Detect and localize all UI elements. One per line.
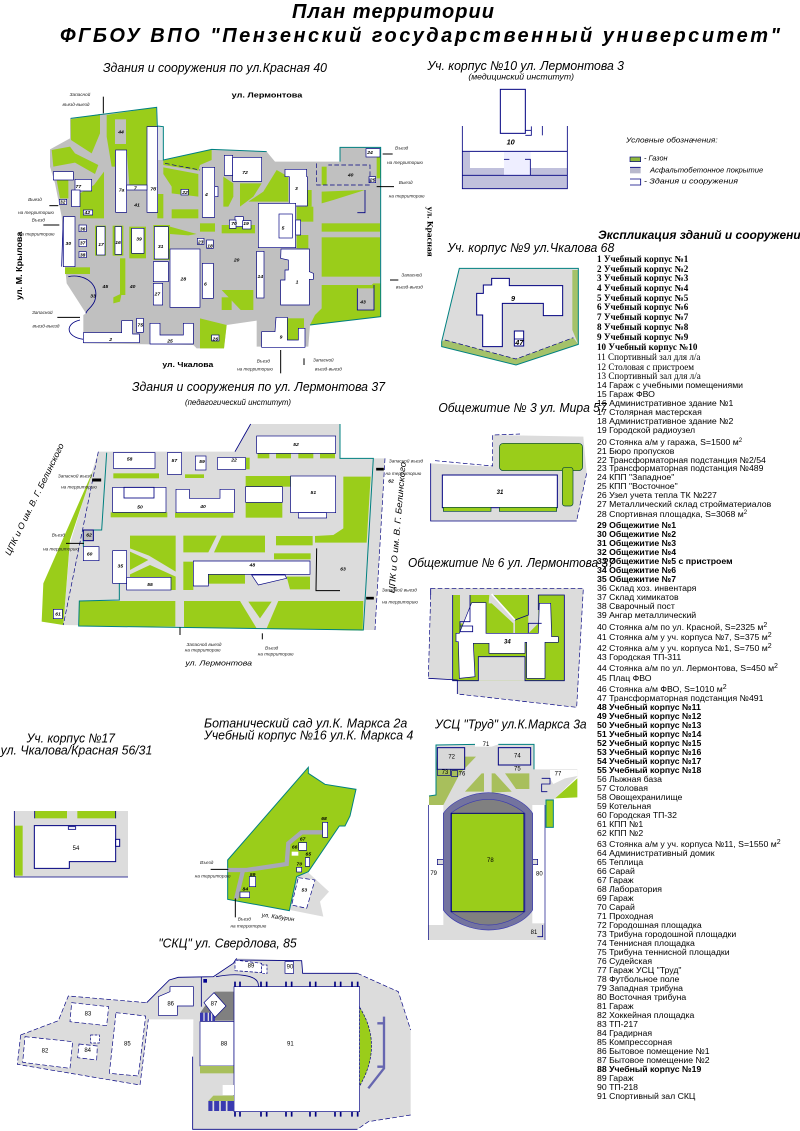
gate notes: Въезд	[265, 645, 279, 650]
heading: building 17	[0, 731, 152, 758]
building labels: 51	[311, 490, 316, 496]
map: Trud: 74	[514, 754, 521, 760]
map: Trud	[428, 742, 577, 940]
building labels: 22	[230, 458, 237, 464]
gate notes: на территорию	[61, 484, 97, 489]
explication list: 43 Городская ТП-311	[597, 652, 681, 662]
map labels: 43	[359, 299, 366, 305]
explication list: 64 Административный домик	[597, 848, 715, 858]
explication list: 54 Учебный корпус №17	[597, 756, 701, 766]
map: SKC: 89	[248, 964, 255, 970]
explication list: 20 Стоянка а/м у гаража, S=1500 м	[597, 437, 739, 447]
explication list: 30 Общежитие №2	[597, 529, 676, 539]
map: botanical garden: 67	[300, 837, 306, 843]
explication list: 49 Учебный корпус №12	[597, 711, 701, 721]
map: Trud: 78	[487, 858, 494, 864]
explication list: 59 Котельная	[597, 801, 651, 811]
map labels: 4	[204, 192, 208, 198]
explication list: 80 Восточная трибуна	[597, 992, 686, 1002]
explication list: 2 Учебный корпус №2	[597, 264, 689, 274]
legend: - Здания и сооружения	[644, 176, 738, 185]
map labels: 44	[117, 129, 124, 135]
gate notes: на территорию	[43, 547, 79, 552]
map labels: 25	[369, 178, 376, 184]
building labels: 35	[118, 564, 123, 570]
explication list: 62 КПП №2	[597, 828, 643, 838]
explication list: 74 Теннисная площадка	[597, 938, 695, 948]
map labels: 7	[134, 185, 137, 191]
map: dorm 3	[431, 434, 587, 521]
title: ФГБОУ ВПО "Пензенский государственный университет"	[60, 25, 781, 47]
explication list: 2	[768, 643, 772, 650]
explication list: 76 Судейская	[597, 956, 652, 966]
map labels: 32	[60, 200, 66, 206]
gate notes: въезд-выезд	[396, 285, 423, 290]
explication list: 2	[739, 438, 743, 444]
street names: ЦПК и О им. В. Г. Белинского	[3, 441, 66, 557]
map labels: 72	[242, 170, 248, 176]
gate notes: Запасной выезд	[382, 587, 417, 593]
map labels: 7а	[119, 187, 125, 193]
explication list: 15 Гараж ФВО	[597, 389, 655, 399]
map: Trud: 73	[442, 770, 449, 776]
map: building 17: 54	[73, 846, 80, 852]
gate notes: на территорию	[18, 210, 54, 215]
building labels: 59	[199, 459, 205, 465]
gate notes: Запасной	[32, 309, 53, 315]
map labels: 45	[102, 284, 108, 290]
explication list: 69 Гараж	[597, 893, 634, 903]
map labels: 41	[133, 203, 140, 209]
map labels: 16	[115, 240, 121, 246]
heading: dorm 6: Общежитие № 6 ул. Лермонтова 37	[408, 555, 615, 570]
map labels: 1	[296, 279, 299, 285]
heading: building 10	[426, 58, 625, 81]
explication list: 23 Трансформаторная подстанция №489	[597, 463, 764, 473]
map: SKC: 85	[124, 1042, 131, 1048]
map: botanical garden: Въезд	[200, 860, 214, 865]
explication list: 5 Учебный корпус №5	[597, 293, 689, 303]
explication list: 2	[777, 839, 781, 846]
explication list: 57 Столовая	[597, 783, 648, 793]
explication list: 90 ТП-218	[597, 1082, 638, 1092]
explication list: 40 Стоянка а/м по ул. Красной, S=2325 м	[597, 622, 763, 632]
explication list: 52 Учебный корпус №15	[597, 738, 701, 748]
gate notes: на территорию	[237, 367, 273, 372]
map: SKC: 84	[84, 1048, 92, 1054]
building labels: 55	[147, 582, 153, 588]
gate notes: Запасной	[313, 357, 334, 363]
explication list: 12 Столовая с пристроем	[597, 362, 694, 372]
explication list: 8 Учебный корпус №8	[597, 322, 689, 332]
map: botanical garden: 59	[250, 872, 256, 878]
map: Krasnaya 40 campus	[14, 91, 425, 373]
explication list: 35 Общежитие №7	[597, 574, 676, 584]
heading: building 17: Уч. корпус №17	[26, 731, 116, 746]
map labels: 38	[80, 253, 86, 259]
map labels: 25	[166, 338, 173, 344]
gate notes: Запасной выезд	[186, 641, 222, 647]
explication list: 37 Склад химикатов	[597, 592, 679, 602]
explication list: 39 Ангар металлический	[597, 610, 696, 620]
explication list: 33 Общежитие №5 с пристроем	[597, 556, 733, 566]
building labels: 60	[87, 552, 93, 558]
gate notes: Въезд	[395, 146, 409, 151]
gate notes: въезд-выезд	[315, 367, 342, 372]
explication list: 22 Трансформаторная подстанция №2/54	[597, 455, 766, 465]
explication list: 34 Общежитие №6	[597, 565, 676, 575]
map labels: 75	[138, 323, 143, 329]
map: botanical garden: 65	[306, 852, 311, 858]
explication list: 19 Городской радиоузел	[597, 425, 695, 435]
upper right area: building 10, legend, building 9	[425, 58, 763, 365]
explication list: 11 Спортивный зал для л/а	[597, 352, 700, 362]
gate notes: въезд-выезд	[33, 323, 60, 328]
map: Trud: 81	[531, 930, 538, 936]
building labels: 40	[199, 504, 206, 510]
heading: building 17: ул. Чкалова/Красная 56/31	[0, 743, 152, 758]
map labels: 40	[347, 173, 354, 179]
gate notes: Запасной въезд	[389, 457, 424, 463]
explication list: 91 Спортивный зал СКЦ	[597, 1091, 696, 1101]
gate notes: на территорию	[258, 652, 294, 657]
explication list: 67 Гараж	[597, 875, 634, 885]
explication list: 25 КПП "Восточное"	[597, 481, 678, 491]
building labels: 50	[137, 505, 143, 511]
explication list: 81 Гараж	[597, 1001, 634, 1011]
heading: building 10: Уч. корпус №10 ул. Лермонтова 3	[426, 58, 625, 73]
map: building 17	[14, 811, 128, 877]
map: SKC: 86	[167, 1002, 175, 1008]
map labels: 5	[282, 225, 285, 231]
map labels: 18	[207, 243, 213, 249]
legend: Условные обозначения:	[625, 135, 718, 144]
heading: Lermontova 37	[132, 379, 386, 407]
explication list: 61 КПП №1	[597, 819, 643, 829]
explication list: 86 Бытовое помещение №1	[597, 1046, 710, 1056]
gate notes: Запасной	[70, 91, 91, 97]
explication list: 2	[768, 632, 772, 639]
gate notes: Выезд	[28, 197, 42, 202]
explication list: 42 Стоянка а/м у уч. корпуса №1, S=750 м	[597, 643, 768, 653]
explication list	[597, 254, 781, 1101]
explication list: 31 Общежитие №3	[597, 538, 676, 548]
explication list: 48 Учебный корпус №11	[597, 702, 701, 712]
explication list: 28 Спортивная площадка, S=3068 м	[597, 509, 744, 519]
building labels: 61	[55, 612, 61, 618]
map labels: 70	[231, 221, 237, 227]
gate notes	[43, 457, 424, 657]
heading: Lermontova 37: Здания и сооружения по ул. Лермонтова 37	[132, 379, 386, 394]
map: SKC: 88	[221, 1042, 228, 1048]
explication list: 6 Учебный корпус №6	[597, 302, 689, 312]
map: botanical garden	[195, 767, 356, 928]
explication list: 16 Административное здание №1	[597, 398, 733, 408]
map: botanical garden: 66	[292, 844, 298, 850]
explication list: 78 Футбольное поле	[597, 974, 680, 984]
map labels: 23	[197, 239, 204, 245]
explication list: 4 Учебный корпус №4	[597, 283, 689, 293]
street names	[3, 441, 408, 667]
legend	[625, 135, 763, 185]
map labels: 28	[180, 277, 186, 283]
explication list: 55 Учебный корпус №18	[597, 765, 701, 775]
explication list: 73 Трибуна городошной площадки	[597, 929, 736, 939]
street names: ул. Лермонтова	[184, 658, 252, 667]
map: botanical garden: Въезд	[238, 917, 251, 922]
map labels: 2	[108, 337, 112, 343]
explication list: 84 Градирная	[597, 1028, 652, 1038]
map: botanical garden: ул. Кабурин	[260, 913, 295, 923]
map: Trud: 72	[448, 754, 456, 760]
map: SKC: 90	[287, 965, 294, 971]
gate notes: Запасной	[401, 272, 422, 278]
map labels: 9	[280, 334, 283, 340]
heading: building 10: (медицинский институт)	[468, 71, 574, 81]
explication list: 53 Учебный корпус №16	[597, 747, 701, 757]
street names	[14, 91, 303, 369]
building labels: 63	[340, 567, 346, 573]
explication list: 70 Сарай	[597, 902, 635, 912]
map labels: 42	[84, 210, 90, 216]
explication list: 88 Учебный корпус №19	[597, 1064, 701, 1074]
outlines	[63, 424, 385, 630]
explication list: 60 Городская ТП-32	[597, 810, 677, 820]
heading: dorm 3: Общежитие № 3 ул. Мира 57	[438, 400, 607, 415]
explication list: 83 ТП-217	[597, 1019, 638, 1029]
explication list: 36 Склад хоз. инвентаря	[597, 583, 697, 593]
explication list: 44 Стоянка а/м по ул. Лермонтова, S=450 м	[597, 663, 774, 673]
map: Trud: 79	[430, 871, 438, 877]
building labels: 62	[86, 532, 92, 538]
explication list: 89 Гараж	[597, 1073, 634, 1083]
building labels: 58	[127, 457, 133, 463]
explication list: 75 Трибуна теннисной площадки	[597, 947, 730, 957]
explication list: 9 Учебный корпус №9	[597, 332, 689, 342]
sports complex Trud	[428, 716, 587, 940]
gate notes: на территорию	[185, 648, 221, 653]
heading: Krasnaya 40: Здания и сооружения по ул.Красная 40	[103, 60, 328, 75]
map: building 9	[442, 268, 578, 365]
explication list: 1 Учебный корпус №1	[597, 254, 689, 264]
explication list: 7 Учебный корпус №7	[597, 312, 689, 322]
explication list: 24 КПП "Западное"	[597, 472, 674, 482]
gate notes: въезд-выезд	[63, 102, 90, 107]
street name: ул. Красная	[425, 207, 434, 257]
heading: botanical garden: Ботанический сад ул.К. Маркса 2а	[204, 715, 407, 730]
map: building 9: 9	[511, 294, 516, 303]
explication list: 72 Городошная площадка	[597, 920, 702, 930]
map labels: 6	[204, 281, 207, 287]
map: dorm 3: 31	[497, 490, 503, 496]
building labels: 48	[249, 563, 255, 569]
map labels: 30	[66, 241, 71, 247]
map labels: 14	[258, 274, 263, 280]
map labels: 7б	[150, 186, 157, 193]
building labels: 57	[172, 458, 177, 464]
explication list: 3 Учебный корпус №3	[597, 273, 689, 283]
map labels: 27	[154, 291, 160, 297]
explication list: 27 Металлический склад стройматериалов	[597, 499, 772, 509]
heading: SKC: "СКЦ" ул. Свердлова, 85	[158, 936, 297, 951]
map: dorm 6	[428, 588, 583, 707]
map labels: 37	[80, 241, 86, 247]
map labels: 17	[98, 242, 104, 248]
heading: building 9: Уч. корпус №9 ул.Чкалова 68	[446, 240, 615, 255]
explication list: 2	[744, 510, 748, 516]
map: SKC: 91	[287, 1042, 294, 1048]
gate notes: Въезд	[52, 533, 65, 538]
street names: ул. Лермонтова	[232, 91, 303, 100]
SKC complex	[17, 936, 411, 1129]
map labels: 3	[295, 186, 298, 192]
map labels: 77	[76, 184, 81, 190]
buildings	[53, 127, 380, 347]
gate notes: Въезд	[257, 359, 270, 364]
map labels: 22	[181, 190, 188, 196]
explication list: 58 Овощехранилище	[597, 792, 683, 802]
explication list: 56 Лыжная база	[597, 774, 662, 784]
map: SKC: 82	[42, 1048, 49, 1054]
explication list: 77 Гараж УСЦ "Труд"	[597, 965, 682, 975]
map labels: 20	[233, 257, 240, 263]
explication list: 47 Трансформаторная подстанция №491	[597, 693, 764, 703]
building labels: 52	[293, 442, 299, 448]
gate notes: на территорию	[19, 232, 55, 237]
explication list: 51 Учебный корпус №14	[597, 729, 701, 739]
map labels: 40	[129, 284, 136, 290]
explication list: 29 Общежитие №1	[597, 520, 676, 530]
explication list: 2	[763, 622, 767, 629]
map labels: 36	[80, 226, 86, 232]
map: botanical garden: 68	[321, 816, 327, 822]
gray parking 44 and 42	[115, 119, 374, 310]
explication list: 65 Теплица	[597, 857, 643, 867]
map labels: 31	[158, 244, 164, 250]
legend: - Газон	[644, 153, 668, 162]
map labels: 33	[90, 294, 96, 300]
heading: Trud: УСЦ "Труд" ул.К.Маркса 3а	[434, 716, 587, 731]
gate notes: на территорию	[382, 599, 418, 604]
site boundaries	[62, 107, 381, 339]
map: SKC: 83	[85, 1011, 92, 1017]
gate notes: на территорию	[389, 194, 425, 199]
title: План территории	[292, 1, 494, 23]
map labels: 26	[212, 337, 218, 343]
explication list: 18 Административное здание №2	[597, 416, 733, 426]
explication list: 71 Проходная	[597, 911, 653, 921]
gate notes: Запасной въезд	[58, 473, 93, 479]
explication list: 38 Сварочный пост	[597, 601, 675, 611]
heading: botanical garden: Учебный корпус №16 ул.К. Маркса 4	[203, 727, 413, 742]
street names: ул. М. Крылова	[14, 231, 24, 300]
explication list: 14 Гараж с учебными помещениями	[597, 380, 743, 390]
explication list: 82 Хоккейная площадка	[597, 1010, 694, 1020]
map: Trud: 76	[459, 772, 466, 778]
explication list: 2	[723, 684, 727, 691]
street names: ул. Чкалова	[162, 360, 214, 369]
explication list: 10 Учебный корпус №10	[597, 342, 698, 352]
map: botanical garden: 53	[302, 888, 307, 894]
gate notes: на территорию	[385, 471, 422, 476]
explication list: 26 Узел учета тепла ТК №227	[597, 490, 717, 500]
map: SKC: 87	[211, 1001, 218, 1007]
gate notes: Въезд	[32, 218, 45, 223]
heading: botanical garden	[203, 715, 413, 742]
map labels: 24	[366, 150, 373, 156]
explication list: 32 Общежитие №4	[597, 547, 676, 557]
title	[60, 1, 781, 47]
explication list: 13 Спортивный зал для л/а	[597, 371, 701, 381]
map: Lermontova 37 campus	[3, 424, 424, 667]
dormitories 3 and 6	[408, 400, 615, 707]
heading: Lermontova 37: (педагогический институт)	[185, 397, 291, 407]
map: building 10	[462, 89, 567, 189]
street names: ЦПК и О им. В. Г. Белинского	[386, 461, 408, 594]
map: botanical garden: на территорию	[195, 874, 231, 879]
map labels	[60, 129, 376, 344]
explication list: 68 Лаборатория	[597, 884, 662, 894]
explication list: 63 Стоянка а/м у уч. корпуса №11, S=1550 м	[597, 839, 777, 849]
map: SKC	[17, 958, 411, 1129]
map: Trud: 71	[483, 742, 490, 748]
building labels	[55, 442, 394, 618]
gate notes	[18, 91, 425, 372]
explication list: 41 Стоянка а/м у уч. корпуса №7, S=375 м	[597, 632, 768, 642]
map labels: 19	[243, 221, 249, 227]
map: building 9: 47	[514, 338, 524, 347]
explication list: 2	[774, 663, 778, 670]
map: dorm 6: 34	[504, 639, 511, 645]
gate markers	[66, 468, 383, 639]
explication list: 21 Бюро пропусков	[597, 446, 675, 456]
explication list: 87 Бытовое помещение №2	[597, 1055, 710, 1065]
explication list: 46 Стоянка а/м ФВО, S=1010 м	[597, 684, 723, 694]
explication list: 79 Западная трибуна	[597, 983, 683, 993]
explication list: 45 Плац ФВО	[597, 673, 652, 683]
explication list: 85 Компрессорная	[597, 1037, 672, 1047]
map: Trud: 80	[536, 872, 543, 878]
gate notes: Выезд	[399, 180, 413, 185]
building labels: 62	[388, 479, 394, 485]
explication list: 66 Сарай	[597, 866, 635, 876]
map: botanical garden: 84	[243, 887, 248, 893]
map labels: 39	[136, 237, 142, 243]
buildings	[53, 436, 336, 619]
gate markers	[43, 97, 398, 373]
gate notes: на территорию	[387, 160, 423, 165]
building 17 and botanical garden	[0, 715, 413, 928]
map: botanical garden: на территорию	[230, 923, 267, 928]
map: botanical garden: 70	[297, 861, 302, 867]
legend: Асфальтобетонное покрытие	[649, 165, 763, 174]
map: Trud: 77	[555, 772, 562, 778]
explication list: 17 Столярная мастерская	[597, 407, 702, 417]
explication list: 50 Учебный корпус №13	[597, 720, 701, 730]
map: Trud: 75	[514, 767, 521, 773]
map: building 10: 10	[507, 137, 515, 146]
